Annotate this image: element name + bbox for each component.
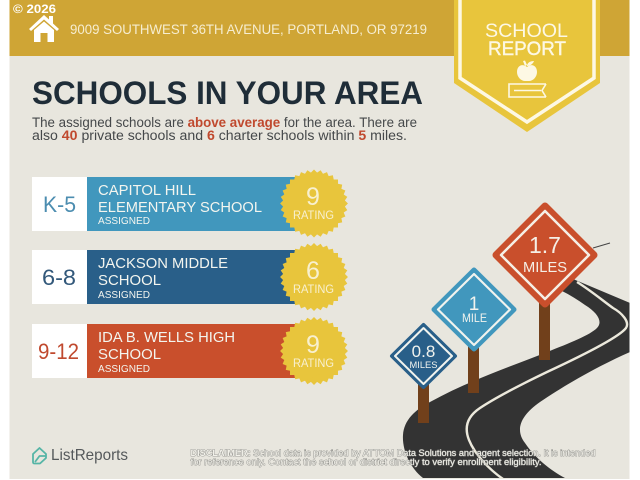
header band: [10, 0, 630, 56]
school name: ELEMENTARY SCHOOL: [98, 199, 262, 216]
school name: CAPITOL HILL: [98, 182, 196, 199]
rating badge: RATING: [293, 358, 334, 370]
badge: school report shield: [454, 0, 600, 132]
grade: 6-8: [42, 265, 76, 290]
panel: middle school row: [32, 243, 348, 311]
school name: JACKSON MIDDLE: [98, 255, 228, 272]
school name: ASSIGNED: [98, 289, 150, 301]
disclaimer: [190, 448, 596, 467]
sign: 0.8 miles: MILES: [410, 360, 438, 371]
rating badge: 6: [306, 257, 320, 285]
sign: 1.7 miles: MILES: [523, 259, 567, 276]
title: SCHOOLS IN YOUR AREA: [32, 75, 423, 111]
address: 9009 SOUTHWEST 36TH AVENUE, PORTLAND, OR 97219: [70, 22, 427, 37]
sign: 1.7 miles: 1.7: [529, 232, 561, 258]
sign: 0.8 miles: [392, 325, 455, 423]
road illustration: [403, 243, 630, 479]
copyright: © 2026: [13, 2, 56, 16]
panel: elementary school row: [32, 170, 348, 237]
icon: logo mark: [33, 448, 46, 464]
grade: 9-12: [38, 339, 79, 364]
school name: ASSIGNED: [98, 363, 150, 375]
sign: 1 mile: 1: [469, 294, 479, 315]
intro text: [32, 115, 417, 143]
rating badge: [280, 170, 348, 237]
intro text: The assigned schools are above average for the area. There are: [32, 115, 417, 130]
school name: SCHOOL: [98, 346, 161, 363]
badge title: SCHOOL: [485, 21, 568, 42]
school name: SCHOOL: [98, 272, 161, 289]
school name: [98, 182, 262, 227]
sign: 0.8 miles: 0.8: [412, 342, 435, 361]
sign: 1 mile: [434, 270, 514, 393]
sign: 1.7 miles: [496, 206, 594, 360]
rating badge: RATING: [293, 210, 334, 222]
sign: 1 mile: MILE: [462, 311, 487, 325]
rating badge: [280, 243, 348, 311]
school name: IDA B. WELLS HIGH: [98, 329, 235, 346]
school name: ASSIGNED: [98, 215, 150, 227]
icon: apple on books: [509, 60, 546, 97]
rating badge: RATING: [293, 284, 334, 296]
rating badge: 9: [306, 331, 320, 359]
intro text: also 40 private schools and 6 charter schools within 5 miles.: [32, 128, 407, 143]
disclaimer: DISCLAIMER: School data is provided by ATTOM Data Solutions and agent selection. It is intended: [190, 448, 596, 458]
disclaimer: for reference only. Contact the school or district directly to verify enrollment eligibility.: [190, 457, 542, 467]
school name: [98, 329, 235, 375]
panel: high school row: [32, 317, 348, 385]
icon: house: [29, 15, 59, 42]
logo: ListReports: ListReports: [51, 447, 128, 464]
badge title: REPORT: [488, 39, 566, 60]
rating badge: 9: [306, 183, 320, 211]
badge title: [485, 21, 568, 60]
grade: K-5: [43, 192, 76, 217]
school name: [98, 255, 228, 301]
rating badge: [280, 317, 348, 385]
